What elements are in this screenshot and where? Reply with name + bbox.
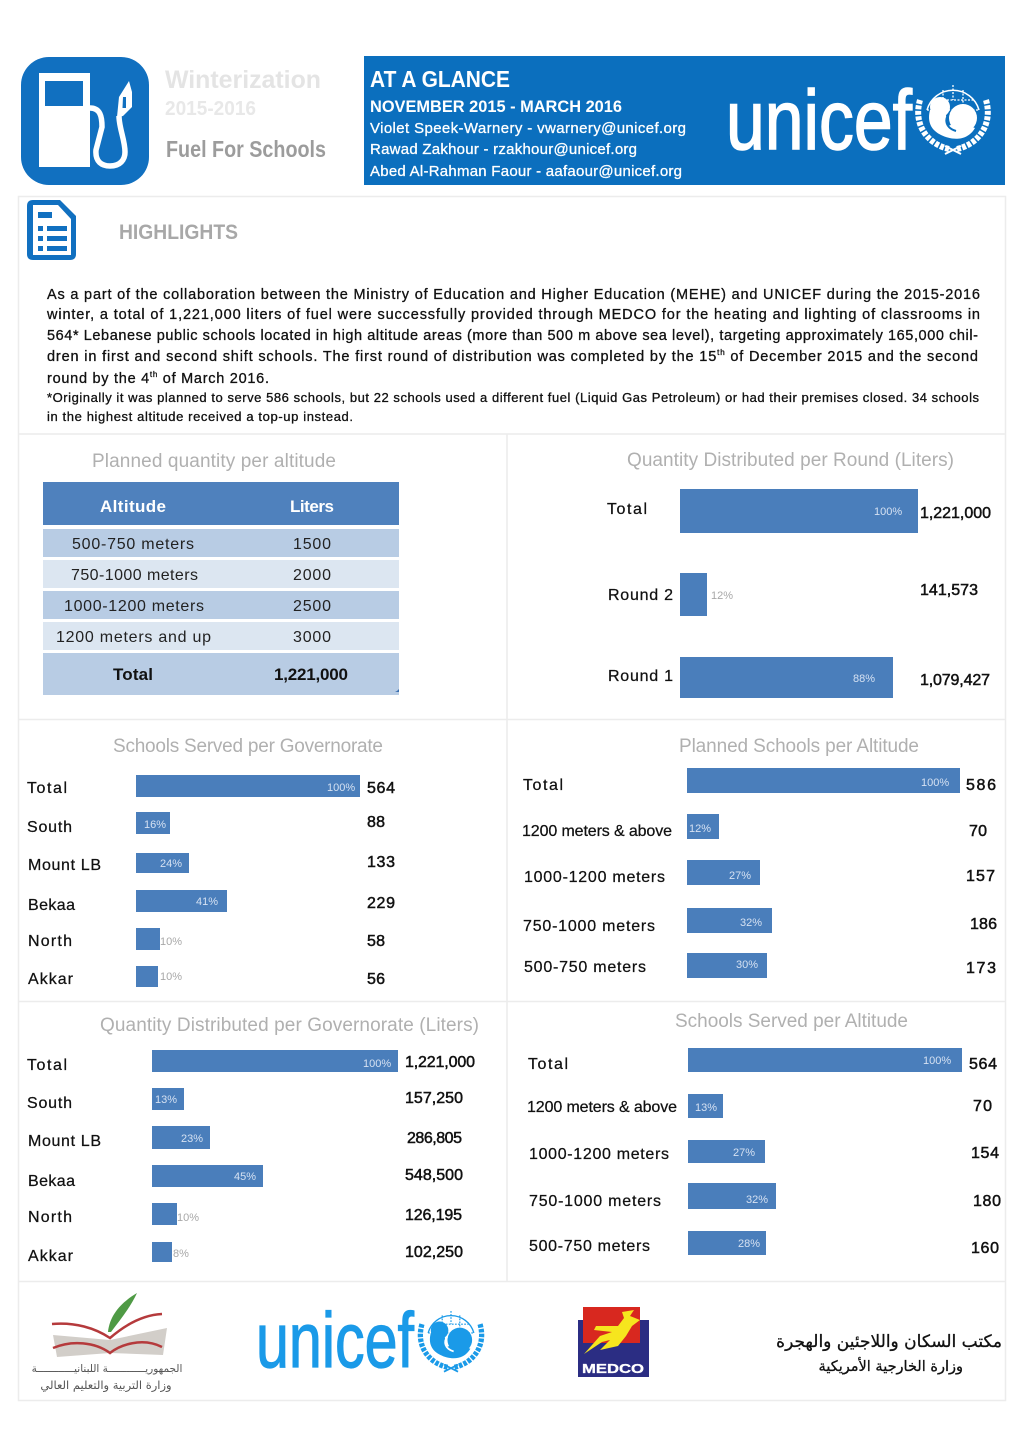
text block: footnote xyxy=(47,390,980,424)
logo: ministry of education: الجمهوريــــــــــــة اللبنانيــــــــــــة xyxy=(32,1363,182,1375)
bar chart: 12% xyxy=(711,590,733,602)
text block: highlights paragraph: th xyxy=(717,348,725,357)
table: 750-1000 meters xyxy=(71,567,198,584)
bar chart: Akkar xyxy=(28,971,74,988)
bar chart: 586 xyxy=(966,777,996,794)
bar chart: 102,250 xyxy=(405,1244,463,1261)
bar chart: 1,079,427 xyxy=(920,672,990,689)
bar chart: 1,221,000 xyxy=(920,505,991,522)
bar chart: 1200 meters & above xyxy=(522,823,672,840)
text block: highlights paragraph: of December 2015 and the second xyxy=(725,349,978,365)
bar chart: 10% xyxy=(177,1212,199,1224)
bar chart: Bekaa xyxy=(28,1173,75,1190)
dates: NOVEMBER 2015 - MARCH 2016 xyxy=(370,97,622,116)
table xyxy=(43,482,399,695)
bar chart: Total xyxy=(607,501,647,518)
panel: planned quantity per altitude xyxy=(43,451,399,695)
bar chart: 500-750 meters xyxy=(529,1238,650,1255)
text block: footnote: *Originally it was planned to serve 586 schools, but 22 schools used a different fuel (Liquid Gas Petroleum) or had their premises closed. 34 schools xyxy=(47,390,980,405)
bar chart: South xyxy=(27,1095,72,1112)
bar chart: Total xyxy=(27,1057,67,1074)
text block: highlights paragraph xyxy=(46,287,980,387)
bar chart: 10% xyxy=(160,971,182,983)
bar chart: 88% xyxy=(853,673,875,685)
heading: Quantity Distributed per Round (Liters) xyxy=(627,450,954,471)
heading: at a glance: AT A GLANCE xyxy=(370,66,510,92)
bar chart: 100% xyxy=(363,1058,391,1070)
bar chart: 186 xyxy=(970,916,997,933)
logo: MEDCO xyxy=(578,1307,649,1377)
bar chart: 1000-1200 meters xyxy=(524,869,665,886)
bar chart: 13% xyxy=(155,1094,177,1106)
bar chart: Total xyxy=(27,780,67,797)
logo: MEDCO: MEDCO xyxy=(582,1361,644,1376)
panel: schools served per governorate xyxy=(27,736,395,988)
bar chart: 100% xyxy=(874,506,902,518)
bar chart: 88 xyxy=(367,814,385,831)
panel: schools served per altitude xyxy=(527,1011,1001,1257)
text block: highlights paragraph: 564* Lebanese public schools located in high altitude areas (more than 500 m above sea level), targeting approximately 165,000 chil- xyxy=(47,328,978,344)
bar chart: 229 xyxy=(367,895,395,912)
table: Total xyxy=(113,665,153,684)
bar chart: 133 xyxy=(367,854,395,871)
text: US State Department bureau in Arabic: وزارة الخارجية الأمريكية xyxy=(819,1357,963,1375)
bar chart: 180 xyxy=(973,1193,1001,1210)
title: Winterization: Winterization xyxy=(165,66,321,94)
bar chart: 23% xyxy=(181,1133,203,1145)
bar chart: 100% xyxy=(921,777,949,789)
bar chart xyxy=(27,775,395,988)
bar chart: 750-1000 meters xyxy=(523,918,655,935)
bar chart: 56 xyxy=(367,971,385,988)
bar chart: 157,250 xyxy=(405,1090,463,1107)
bar chart: 286,805 xyxy=(407,1130,462,1147)
bar chart: 28% xyxy=(738,1238,760,1250)
bar chart: 70 xyxy=(969,823,987,840)
logo: unicef white: unicef xyxy=(726,73,913,167)
text block: highlights paragraph: round by the 4 xyxy=(47,371,149,387)
bar chart xyxy=(27,1050,475,1265)
bar chart: 45% xyxy=(234,1171,256,1183)
bar chart: 126,195 xyxy=(405,1207,462,1224)
logo: ministry of education xyxy=(32,1293,182,1393)
text block: highlights paragraph: th xyxy=(150,370,157,379)
text block: highlights paragraph: As a part of the collaboration between the Ministry of Education and Higher Education (MEHE) and UNICEF during the 2015-2016 xyxy=(47,287,980,303)
bar chart xyxy=(527,1048,1001,1257)
bar chart: 100% xyxy=(327,782,355,794)
bar chart: 70 xyxy=(973,1098,992,1115)
heading: Schools Served per Governorate xyxy=(113,736,383,757)
bar chart: 157 xyxy=(966,868,995,885)
icon: document xyxy=(27,200,76,260)
bar chart: 500-750 meters xyxy=(524,959,646,976)
bar chart xyxy=(607,489,991,698)
heading: highlights: HIGHLIGHTS xyxy=(119,221,238,244)
contacts: Rawad Zakhour - rzakhour@unicef.org xyxy=(370,141,637,158)
contacts: Abed Al-Rahman Faour - aafaour@unicef.org xyxy=(370,163,682,180)
table: 500-750 meters xyxy=(72,536,194,553)
heading: Planned quantity per altitude xyxy=(92,451,336,472)
table: 1000-1200 meters xyxy=(64,598,204,615)
heading: Quantity Distributed per Governorate (Liters) xyxy=(100,1015,479,1036)
bar chart: Total xyxy=(523,777,563,794)
text block: highlights paragraph: of March 2016. xyxy=(158,371,269,387)
bar chart: 30% xyxy=(736,959,758,971)
bar chart: 1,221,000 xyxy=(405,1054,475,1071)
bar chart: North xyxy=(28,933,72,950)
text block: highlights paragraph: winter, a total of 1,221,000 liters of fuel were successfully provided through MEDCO for the heating and lighting of classrooms in xyxy=(46,307,980,323)
bar chart: 1200 meters & above xyxy=(527,1099,677,1116)
table: Altitude xyxy=(100,497,166,516)
bar chart: 41% xyxy=(196,896,218,908)
bar chart: 100% xyxy=(923,1055,951,1067)
bar chart: Total xyxy=(528,1056,568,1073)
bar chart: 12% xyxy=(689,823,711,835)
table: 1200 meters and up xyxy=(56,629,211,646)
logo: ministry of education: وزارة التربية والتعليم العالي xyxy=(40,1378,172,1393)
table: 1500 xyxy=(293,536,331,553)
heading: Schools Served per Altitude xyxy=(675,1011,908,1032)
bar chart: 160 xyxy=(971,1240,999,1257)
panel: planned schools per altitude xyxy=(522,736,997,978)
bar chart: 13% xyxy=(695,1102,717,1114)
contacts: Violet Speek-Warnery - vwarnery@unicef.org xyxy=(370,120,686,137)
bar chart xyxy=(522,768,997,978)
text block: footnote: in the highest altitude received a top-up instead. xyxy=(47,409,353,424)
text: US State Department bureau in Arabic: مكتب السكان واللاجئين والهجرة xyxy=(776,1332,1002,1352)
table: 1,221,000 xyxy=(274,665,348,684)
panel: quantity distributed per governorate xyxy=(27,1015,479,1265)
bar chart: 154 xyxy=(971,1145,999,1162)
bar chart: 548,500 xyxy=(405,1167,463,1184)
table: 2000 xyxy=(293,567,331,584)
bar chart: 32% xyxy=(740,917,762,929)
bar chart: 1000-1200 meters xyxy=(529,1146,669,1163)
bar chart: South xyxy=(27,819,72,836)
bar chart: 27% xyxy=(729,870,751,882)
text block: highlights paragraph: dren in first and second shift schools. The first round of distribution was completed by the 15 xyxy=(47,349,716,365)
bar chart: Mount LB xyxy=(28,857,101,874)
heading: Planned Schools per Altitude xyxy=(679,736,919,757)
icon: fuel pump xyxy=(21,57,149,185)
text: US State Department bureau in Arabic xyxy=(776,1332,1002,1375)
table: 2500 xyxy=(293,598,331,615)
table: Liters xyxy=(290,497,334,516)
panel: partner logos xyxy=(32,1293,1002,1393)
bar chart: 58 xyxy=(367,933,385,950)
bar chart: Akkar xyxy=(28,1248,74,1265)
table: 3000 xyxy=(293,629,331,646)
bar chart: 141,573 xyxy=(920,582,978,599)
subtitle: Fuel For Schools: Fuel For Schools xyxy=(166,136,326,162)
bar chart: Round 1 xyxy=(608,668,673,685)
bar chart: Bekaa xyxy=(28,897,75,914)
contacts xyxy=(370,120,686,180)
bar chart: Mount LB xyxy=(28,1133,101,1150)
bar chart: 16% xyxy=(144,819,166,831)
bar chart: 32% xyxy=(746,1194,768,1206)
logo: unicef blue: unicef xyxy=(256,1296,414,1384)
bar chart: Round 2 xyxy=(608,587,673,604)
bar chart: 750-1000 meters xyxy=(529,1193,661,1210)
bar chart: 8% xyxy=(173,1248,189,1260)
bar chart: North xyxy=(28,1209,72,1226)
panel: quantity distributed per round xyxy=(607,450,991,698)
bar chart: 564 xyxy=(367,780,395,797)
bar chart: 24% xyxy=(160,858,182,870)
subtitle: years: 2015-2016 xyxy=(165,98,256,120)
panel: at a glance header xyxy=(364,56,1005,185)
bar chart: 10% xyxy=(160,936,182,948)
bar chart: 27% xyxy=(733,1147,755,1159)
bar chart: 564 xyxy=(969,1056,997,1073)
bar chart: 173 xyxy=(966,960,996,977)
